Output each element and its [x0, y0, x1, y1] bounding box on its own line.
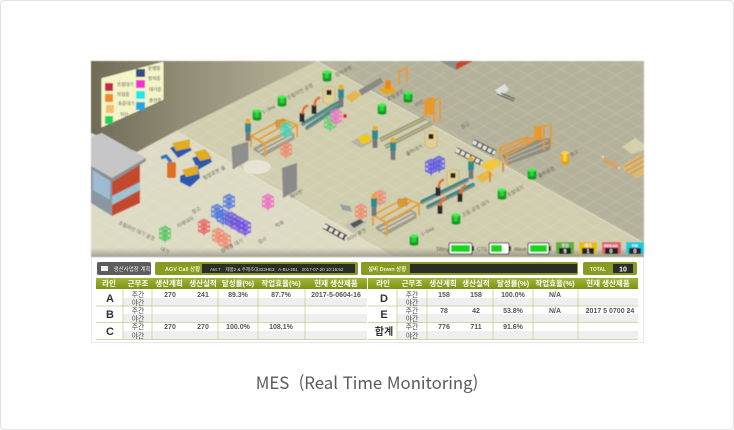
dark upper-right floor — [317, 61, 644, 243]
left production table: 270 — [164, 324, 176, 331]
right production table: E — [380, 309, 388, 321]
floor labels: 경고 — [569, 148, 580, 159]
left production table: 87.7% — [271, 292, 292, 299]
total box: 10 — [619, 266, 627, 274]
left production table: 108.1% — [269, 324, 294, 331]
status count boxes: BREAK — [604, 243, 618, 248]
wall legend board: 정지중 — [148, 75, 160, 82]
right production table: N/A — [549, 308, 561, 315]
yellow pad left — [360, 135, 372, 144]
kiosk lower — [447, 169, 459, 188]
left production table: 270 — [164, 292, 176, 299]
right production table: 작업효율(%) — [535, 278, 575, 288]
left production table: 현재 생산제품 — [314, 278, 358, 288]
right production table: 야간 — [406, 314, 418, 323]
map button — [97, 262, 151, 275]
right production table: 100.0% — [501, 292, 526, 299]
robot cell — [161, 139, 212, 187]
robot arms A — [300, 97, 320, 122]
barrier — [602, 156, 620, 169]
left production table: 241 — [197, 292, 209, 299]
floor labels: 조립라인 대기 공정 — [117, 219, 156, 243]
floor labels: AGV 충전 — [346, 226, 368, 243]
AGV status bar — [155, 262, 358, 275]
left production table — [96, 278, 367, 340]
floor labels: 조립 공정 대기 — [461, 198, 491, 219]
left production table: C — [106, 326, 114, 338]
central work floor — [176, 61, 644, 257]
right production table: 근무조 — [402, 279, 422, 288]
left production table: 달성률(%) — [222, 278, 255, 288]
main conveyor lower — [422, 179, 473, 207]
factory floor view — [91, 61, 644, 257]
kiosk middle — [425, 130, 437, 149]
status count boxes: 0 — [634, 249, 637, 255]
floor labels: 자재대차 — [176, 215, 196, 230]
right production table: 158 — [470, 292, 482, 299]
red alarm dot — [343, 114, 347, 118]
left production table: 주간 — [132, 290, 144, 299]
AGV status bar: AM 7 제품2 & 주제조대322HE2 A-BU-251 2017-07-20 10:15:52 — [210, 266, 344, 273]
upper right gantry — [500, 125, 551, 165]
status battery indicators: Tilting — [436, 247, 449, 253]
robot arms lower — [436, 179, 466, 214]
top conveyor and robot — [360, 67, 407, 94]
right production table: 158 — [438, 292, 450, 299]
workers middle — [372, 125, 396, 160]
right production table: 711 — [470, 324, 482, 331]
stacked plates left — [324, 226, 346, 238]
floor labels: 적재 — [274, 219, 285, 230]
building — [91, 133, 146, 216]
right production table: 생산계획 — [429, 278, 457, 288]
yellow table A — [345, 90, 361, 103]
floor grid — [91, 61, 644, 257]
floor labels: 창고 — [460, 120, 471, 131]
workers A — [245, 84, 344, 141]
left production table: 주간 — [132, 322, 144, 331]
mixer machine — [351, 133, 376, 148]
right production table: 주간 — [406, 306, 418, 315]
status count boxes — [556, 242, 644, 255]
wall legend board: 조립대기 — [117, 81, 134, 88]
right production table: 생산실적 — [462, 278, 490, 288]
AGV status bar: AGV Call 상황 — [165, 265, 200, 273]
right production table: 776 — [438, 324, 450, 331]
floor labels: 제어반 — [289, 188, 304, 201]
wall legend board: 표준대기 — [118, 100, 135, 107]
left production table: 2017-5-0604-16 — [311, 292, 361, 299]
status count boxes: 대기 — [584, 242, 592, 248]
left production table: A — [106, 293, 114, 305]
assembly gantry lower — [373, 198, 419, 236]
right production table: 2017 5 0700 24 — [586, 308, 634, 315]
left production table: 근무조 — [128, 279, 148, 288]
back wall — [176, 61, 317, 131]
status battery indicators: Wave — [514, 247, 527, 253]
right production table: 합계 — [375, 325, 393, 338]
wall legend board: 대기중 — [149, 86, 161, 93]
kiosk A — [323, 86, 335, 105]
left production table: 89.3% — [228, 292, 249, 299]
worker lower left — [371, 193, 377, 216]
carts — [160, 109, 444, 250]
pallets — [622, 138, 644, 178]
left production table: 생산계획 — [155, 278, 183, 288]
monitoring panel — [91, 257, 644, 343]
forklift — [495, 84, 515, 101]
equipment down bar: 설비 Down 상황 — [368, 265, 406, 273]
red building top — [440, 61, 473, 70]
right production table: N/A — [549, 292, 561, 299]
right production table: 현재 생산제품 — [586, 278, 630, 288]
right production table: 야간 — [406, 298, 418, 307]
yellow status cylinder — [561, 151, 569, 165]
left production table: 100.0% — [226, 324, 251, 331]
floor labels: 대기 — [159, 245, 170, 256]
left production table: 주간 — [132, 306, 144, 315]
wall legend board: 충전중 — [149, 97, 161, 103]
equipment down bar — [361, 262, 578, 275]
status cylinders — [252, 70, 536, 246]
floor labels: 검사공정 — [334, 64, 353, 79]
cabinet right — [282, 163, 297, 198]
caption: MES (Real Time Monitoring) — [256, 370, 478, 394]
floor labels: 1~3ea — [261, 104, 277, 116]
cabinet left — [232, 142, 248, 169]
status count boxes: 9 — [564, 249, 567, 255]
left production table: 생산실적 — [189, 278, 217, 288]
conveyor A — [303, 102, 340, 128]
right production table: 주간 — [406, 322, 418, 331]
floor labels: 조립공정 — [386, 88, 405, 103]
wall legend board — [101, 61, 164, 128]
orange frame middle — [425, 98, 440, 123]
floor labels: 출하공정 — [537, 165, 556, 180]
right production table: 91.6% — [503, 324, 524, 331]
yellow work table — [475, 158, 503, 183]
right production table — [368, 278, 638, 340]
steam — [243, 160, 271, 174]
wall legend board: 차단 — [120, 111, 128, 118]
left production table: 270 — [197, 324, 209, 331]
floor labels — [117, 64, 580, 256]
floor labels: 1~5ea — [420, 226, 436, 238]
bottom floor shading — [91, 248, 644, 257]
floor labels: 창고 — [191, 205, 202, 216]
total box — [583, 262, 637, 275]
total box: TOTAL — [590, 267, 606, 273]
assembly gantry A — [251, 119, 297, 157]
metal plates — [456, 142, 495, 163]
floor labels: 조립라인 공정 — [286, 82, 315, 102]
status count boxes: 정상 — [561, 242, 569, 248]
wall legend board: 운행중 — [148, 65, 160, 71]
floor labels: 포장대기 — [506, 184, 525, 199]
floor labels: 검사 — [257, 235, 268, 246]
status battery indicators — [436, 243, 551, 254]
left production table: 작업효율(%) — [261, 278, 301, 288]
floor labels: 출하대기 — [405, 143, 424, 158]
roller conveyor middle — [380, 118, 432, 147]
left production table: 야간 — [132, 314, 144, 323]
floor labels: 라인 — [414, 98, 425, 109]
right production table: D — [380, 293, 388, 305]
left wall — [91, 61, 176, 152]
zone edge line — [176, 61, 644, 257]
map button: 생산사업장 계획 — [114, 265, 150, 273]
right production table: 달성률(%) — [497, 278, 530, 288]
wall legend board: 작업중 — [117, 91, 129, 98]
right production table: 야간 — [406, 331, 418, 340]
status count boxes: PM — [632, 243, 639, 248]
left production table: B — [106, 309, 114, 321]
status count boxes: 1 — [587, 249, 590, 255]
status count boxes: 0 — [610, 249, 613, 255]
status battery indicators: CTS — [477, 247, 488, 253]
right production table: 53.8% — [503, 308, 524, 315]
right production table: 주간 — [406, 290, 418, 299]
right production table: 라인 — [376, 278, 390, 288]
floor labels: 완제품 대기 — [220, 237, 244, 255]
floor labels: 협업로봇 셀 — [202, 164, 227, 182]
right production table: 78 — [440, 308, 448, 315]
camera and scanner — [340, 204, 368, 233]
left production table: 라인 — [102, 278, 116, 288]
worker lower right — [468, 156, 474, 179]
left production table: 야간 — [132, 331, 144, 340]
right production table: 42 — [472, 308, 480, 315]
left production table: 야간 — [132, 298, 144, 307]
